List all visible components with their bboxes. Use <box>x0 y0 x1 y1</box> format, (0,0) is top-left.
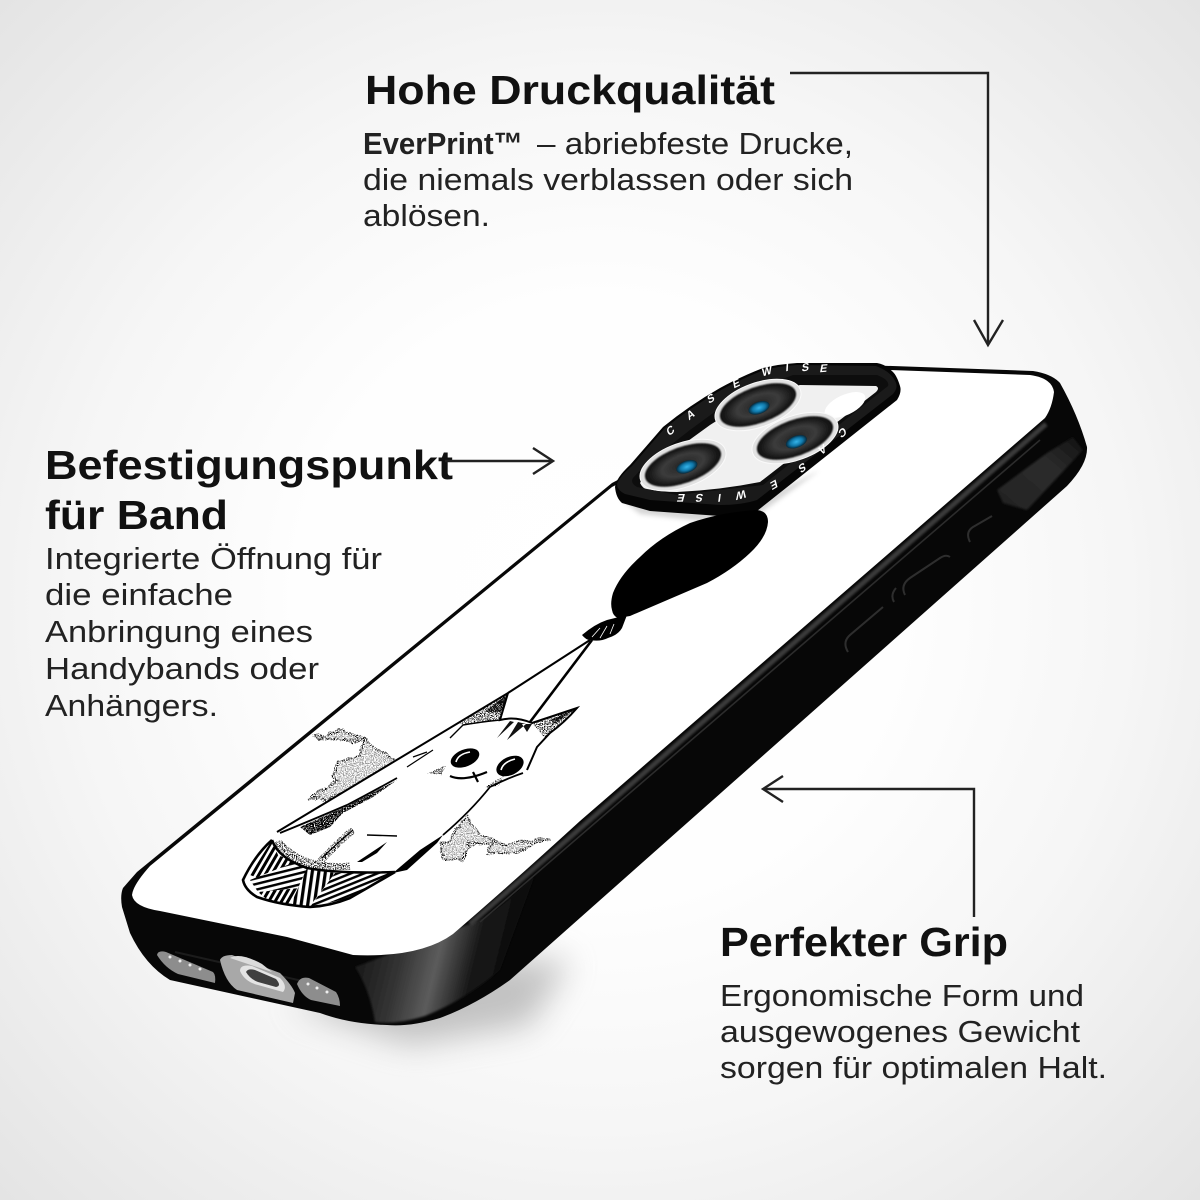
bezel brand text: I <box>717 491 722 503</box>
bezel brand text: A <box>685 407 696 423</box>
bezel brand text: S <box>801 361 810 375</box>
description: ablösen. <box>363 198 490 233</box>
bezel brand text: E <box>769 476 779 492</box>
camera glass <box>640 385 878 492</box>
cat mouth <box>450 772 487 782</box>
bezel brand text: C <box>665 423 676 439</box>
description <box>720 978 1107 1085</box>
left smoke <box>312 730 400 800</box>
cat silhouette <box>243 693 577 907</box>
bezel brand text: I <box>785 362 789 374</box>
heading: Perfekter Grip <box>720 919 1008 965</box>
upper side panel <box>997 437 1083 510</box>
body shadow <box>300 780 397 835</box>
paw details <box>357 835 443 873</box>
bezel brand text: S <box>694 491 704 503</box>
ear shading <box>457 693 577 738</box>
arrow: strap attachment <box>445 448 553 474</box>
balloon strings <box>508 640 592 722</box>
bezel brand text: E <box>819 363 829 375</box>
phone shadow <box>290 960 570 1045</box>
description <box>45 541 382 723</box>
camera flash <box>821 387 869 423</box>
camera module <box>615 361 901 521</box>
case body <box>121 364 1087 1025</box>
heading: für Band <box>45 492 228 538</box>
callout: strap attachment <box>45 442 453 723</box>
description: Ergonomische Form und <box>720 978 1084 1013</box>
cat eyes <box>448 744 527 780</box>
balloon <box>611 510 768 618</box>
description: – abriebfeste Drucke, <box>537 126 853 161</box>
description: Anhängers. <box>45 688 218 723</box>
callout: grip <box>720 919 1107 1085</box>
description: die niemals verblassen oder sich <box>363 162 853 197</box>
camera base edge <box>615 363 901 516</box>
cheek marks <box>431 767 502 787</box>
description: die einfache <box>45 577 233 612</box>
description: sorgen für optimalen Halt. <box>720 1050 1107 1085</box>
bezel brand text: E <box>675 491 686 503</box>
bezel brand text <box>665 361 848 503</box>
ear tips <box>485 693 577 724</box>
hatched sack base <box>243 840 395 907</box>
cat illustration <box>243 693 577 907</box>
heading: Hohe Druckqualität <box>365 67 775 113</box>
bezel brand text: C <box>837 424 848 440</box>
description: EverPrint™ <box>363 126 523 161</box>
description: ausgewogenes Gewicht <box>720 1014 1080 1049</box>
callout: print quality <box>363 67 853 233</box>
balloon knot <box>582 615 627 641</box>
cat outline <box>277 693 577 835</box>
cat stripes <box>497 721 532 740</box>
bezel brand text: A <box>817 441 828 457</box>
bezel brand text: S <box>706 391 716 407</box>
camera bezel top <box>617 365 897 505</box>
arrow: grip <box>763 776 974 917</box>
description: Handybands oder <box>45 651 319 686</box>
description: Integrierte Öffnung für <box>45 541 382 576</box>
heading: Befestigungspunkt <box>45 442 453 488</box>
lens top <box>708 369 808 441</box>
lens right <box>745 402 845 474</box>
phone case <box>121 364 1087 1025</box>
right smoke <box>442 815 550 860</box>
arrow: print quality <box>790 73 1003 345</box>
camera shadow <box>620 470 820 521</box>
case glossy corner <box>355 875 535 1023</box>
bezel brand text: W <box>736 487 746 502</box>
description <box>363 126 853 233</box>
lens left <box>633 429 733 501</box>
heading <box>45 442 453 538</box>
base stipple <box>276 830 353 869</box>
printed back panel <box>132 368 1054 955</box>
bezel brand text: S <box>797 459 807 475</box>
side buttons <box>845 516 992 652</box>
camera recess <box>632 375 888 495</box>
balloon illustration <box>508 510 768 722</box>
bezel brand text: E <box>732 376 741 392</box>
description: Anbringung eines <box>45 614 313 649</box>
side grip details <box>175 424 1046 985</box>
bezel brand text: W <box>762 364 773 380</box>
bottom ports <box>157 951 340 1006</box>
